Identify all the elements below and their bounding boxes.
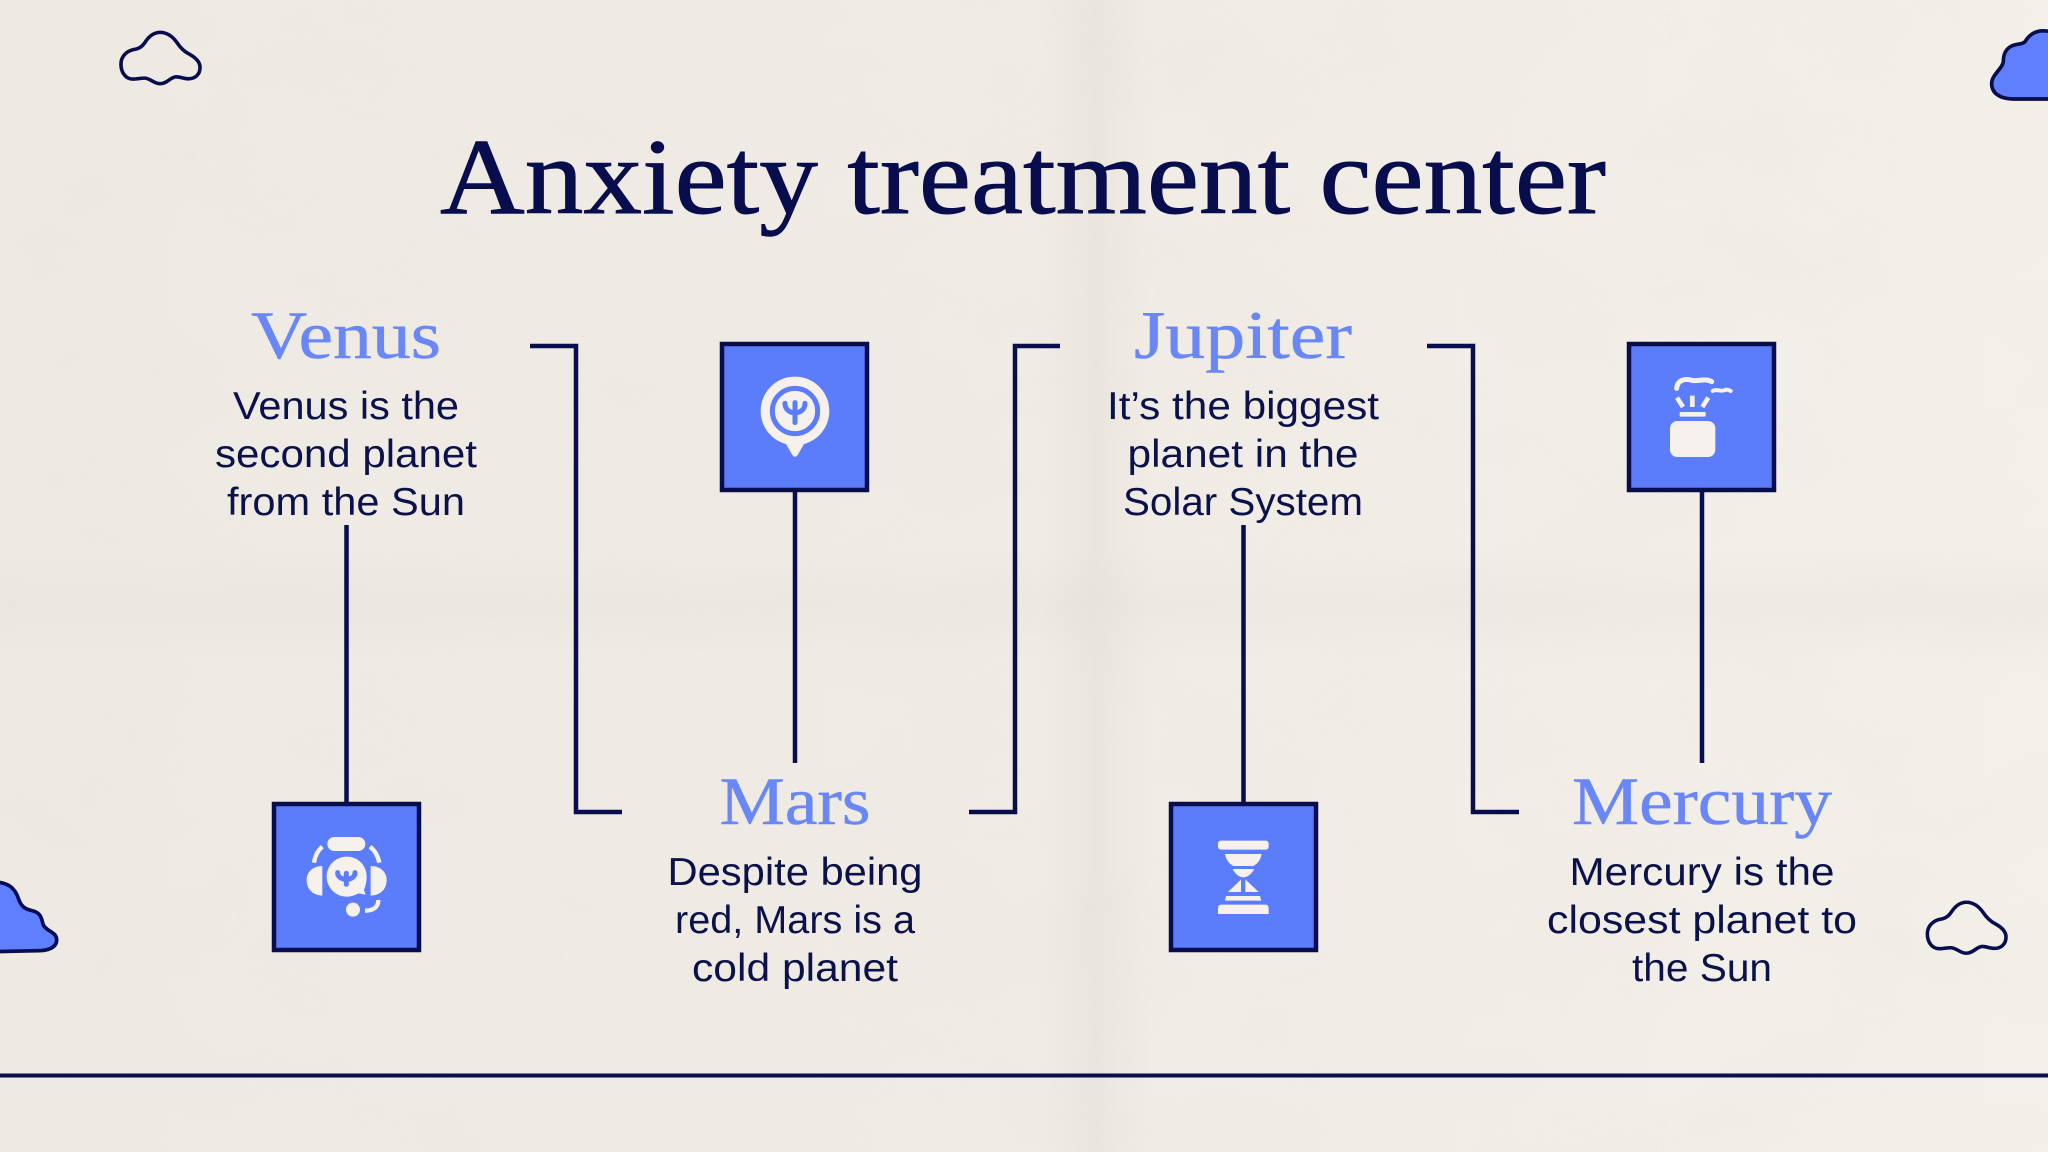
panel: Mercury [1547,344,1857,990]
Mars description: cold planet [692,947,898,990]
Mercury description: Mercury is the [1570,851,1834,894]
cloud filled top right [1992,31,2048,99]
cloud outline bottom right [1927,902,2006,953]
Mars heading: Mars [720,763,870,839]
Venus heading: Venus [251,297,441,373]
icon: headset therapy [274,804,419,950]
Venus description: second planet [215,433,477,476]
Mercury connector [1700,490,1704,763]
Jupiter connector [1241,525,1246,804]
cloud outline top left [121,32,200,84]
bottom rule [0,1074,2048,1078]
panel: Mars [668,344,922,990]
icon: hourglass [1171,804,1316,950]
Jupiter description: Solar System [1123,481,1363,524]
connector bracket 1 [530,346,622,812]
Venus description: Venus is the [233,385,459,428]
title: Anxiety treatment center [440,118,1606,237]
Jupiter description: planet in the [1128,433,1358,476]
Mercury description: closest planet to [1547,899,1857,942]
Mars description: Despite being [668,851,922,894]
Venus connector [344,525,349,804]
Jupiter description [1107,385,1379,524]
connector bracket 2 [969,346,1060,812]
Venus description: from the Sun [227,481,465,524]
cloud filled bottom left [0,882,57,952]
panel: Jupiter [1107,297,1379,950]
Jupiter description: It’s the biggest [1107,385,1379,428]
panel: Venus [215,297,477,950]
Mercury description [1547,851,1857,990]
Mars connector [793,490,797,763]
connector bracket 3 [1427,346,1519,812]
icon: psi location pin [722,344,867,490]
Mercury description: the Sun [1632,947,1772,990]
Mars description: red, Mars is a [675,899,916,942]
Mercury heading: Mercury [1572,763,1832,839]
Jupiter heading: Jupiter [1134,297,1352,373]
icon: aroma diffuser [1629,344,1774,490]
Venus description [215,385,477,524]
Mars description [668,851,922,990]
